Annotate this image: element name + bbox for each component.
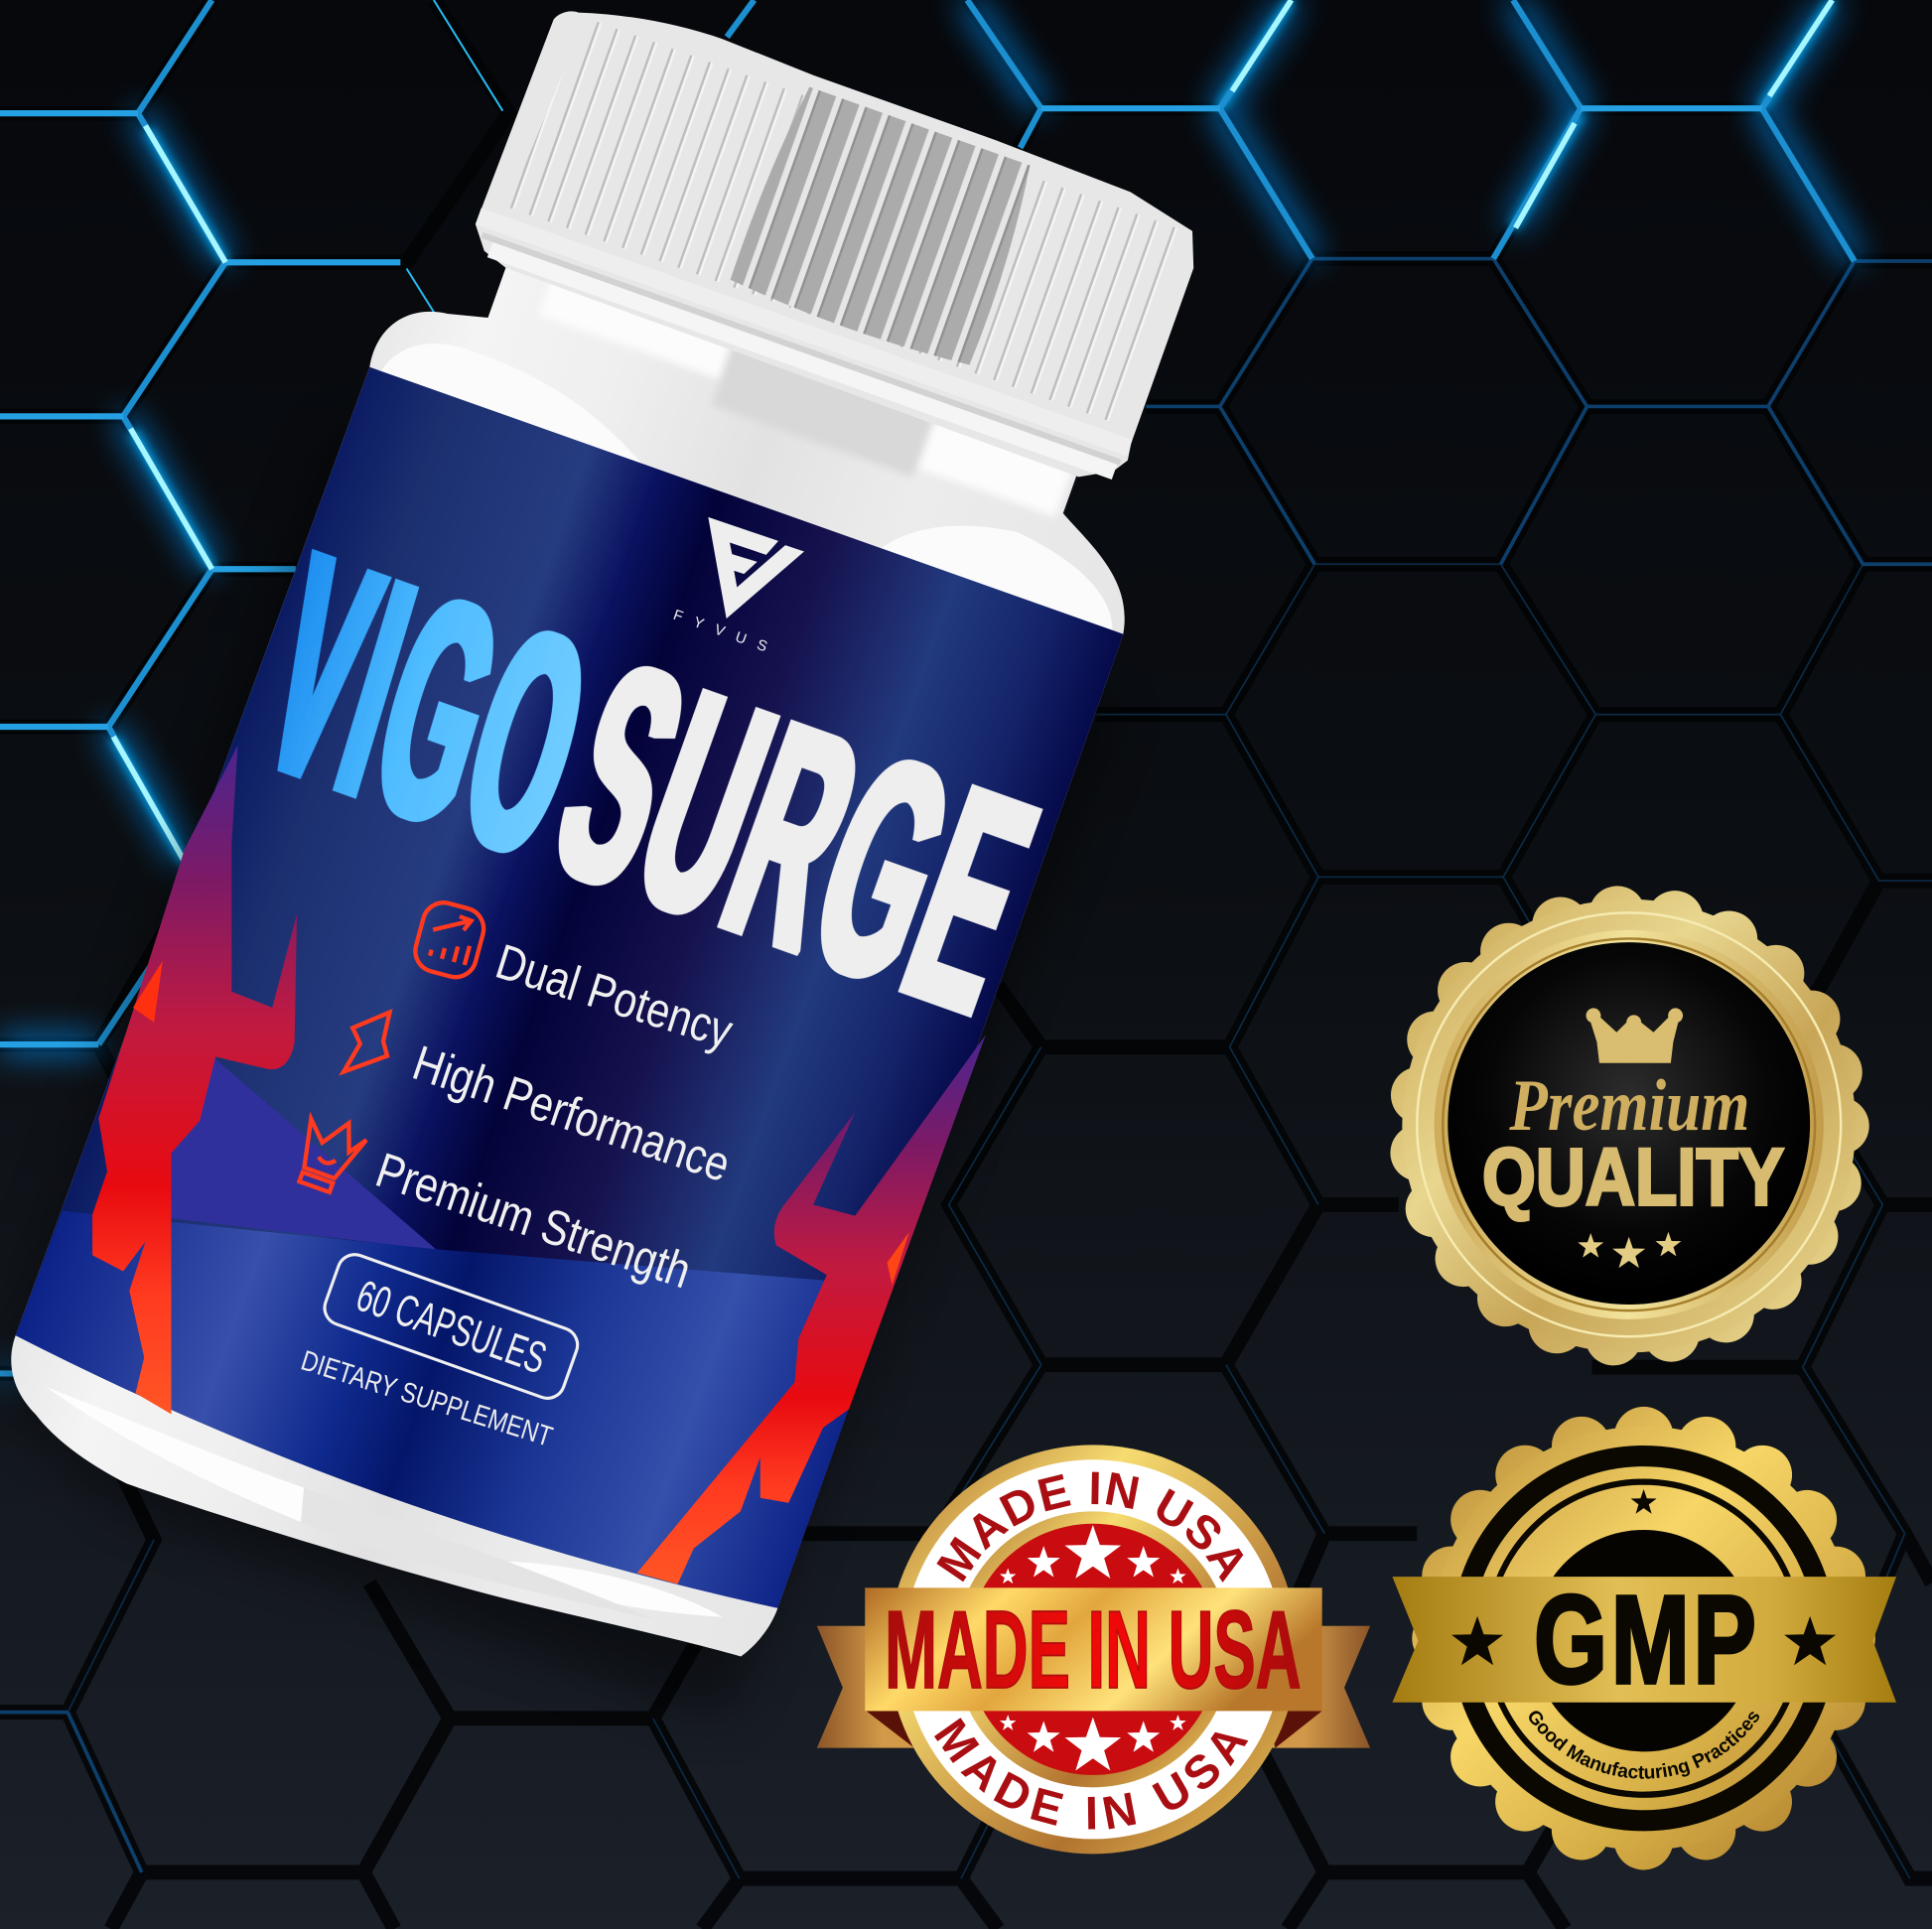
circular text: MADE IN USA: [936, 1471, 1243, 1583]
ribbon tails: [817, 1626, 1370, 1748]
badge: made in usa: [816, 1445, 1370, 1855]
capsule count box: 60 CAPSULES: [350, 1272, 552, 1384]
screw cap: [464, 0, 1215, 490]
navy label: [7, 363, 1125, 1632]
gold seal: [1402, 899, 1856, 1352]
lower blue band: [7, 1032, 887, 1632]
gold seal: [1432, 1427, 1856, 1851]
mountain shape: [101, 1037, 473, 1306]
badge: gmp: [1392, 1406, 1896, 1870]
circular text: [934, 1471, 1249, 1829]
dietary supplement: DIETARY SUPPLEMENT: [297, 1345, 556, 1453]
label artwork and text: [50, 486, 1072, 1550]
icon: crown: [290, 1111, 369, 1198]
quality word: QUALITY: [1482, 1132, 1784, 1222]
wide neon glow: [0, 0, 1855, 1373]
cap rim: [476, 208, 1133, 456]
icon: growth chart: [411, 898, 488, 982]
brand logo mark: [708, 517, 804, 619]
product name: [217, 489, 1070, 1079]
bottle shadow: [0, 434, 1111, 1724]
top star: [1631, 1489, 1657, 1514]
white stars: [1000, 1525, 1186, 1770]
right red figure: [637, 1034, 986, 1585]
ribbon stars: [1451, 1616, 1836, 1665]
neck blocks: [529, 268, 1077, 526]
premium script: Premium: [1508, 1065, 1749, 1147]
ribbon: [1392, 1577, 1896, 1703]
circular text: MADE IN USA: [934, 1718, 1249, 1829]
product name: VIGO: [234, 489, 621, 925]
icon: bolt: [338, 1003, 401, 1084]
cap ribs: [507, 15, 1189, 425]
left red figure: [92, 746, 297, 1414]
gmp text: GMP: [1534, 1570, 1760, 1710]
benefit: dual potency: Dual Potency: [489, 933, 740, 1059]
bottom base highlights: [32, 1373, 724, 1666]
white bottle body: [0, 190, 1186, 1704]
bottle body, cap and label base: [0, 0, 1268, 1704]
stars: [1578, 1232, 1681, 1268]
badge: premium quality: [1402, 899, 1856, 1352]
main ribbon: [865, 1587, 1322, 1711]
shoulder highlights: [381, 313, 1133, 631]
ribbon text: MADE IN USA: [885, 1587, 1302, 1712]
benefit: high performance: High Performance: [406, 1034, 737, 1192]
red accents: [133, 961, 163, 1023]
icon: crown: [1587, 1008, 1683, 1063]
brand name: FYVUS: [671, 608, 781, 659]
product name: SURGE: [524, 600, 1070, 1078]
capsule count box: [320, 1250, 582, 1403]
arc caption: Good Manufacturing Practices: [1529, 1711, 1759, 1779]
benefit: premium strength: Premium Strength: [369, 1142, 698, 1299]
round seal: [889, 1445, 1298, 1854]
product bottle: [0, 0, 1268, 1724]
